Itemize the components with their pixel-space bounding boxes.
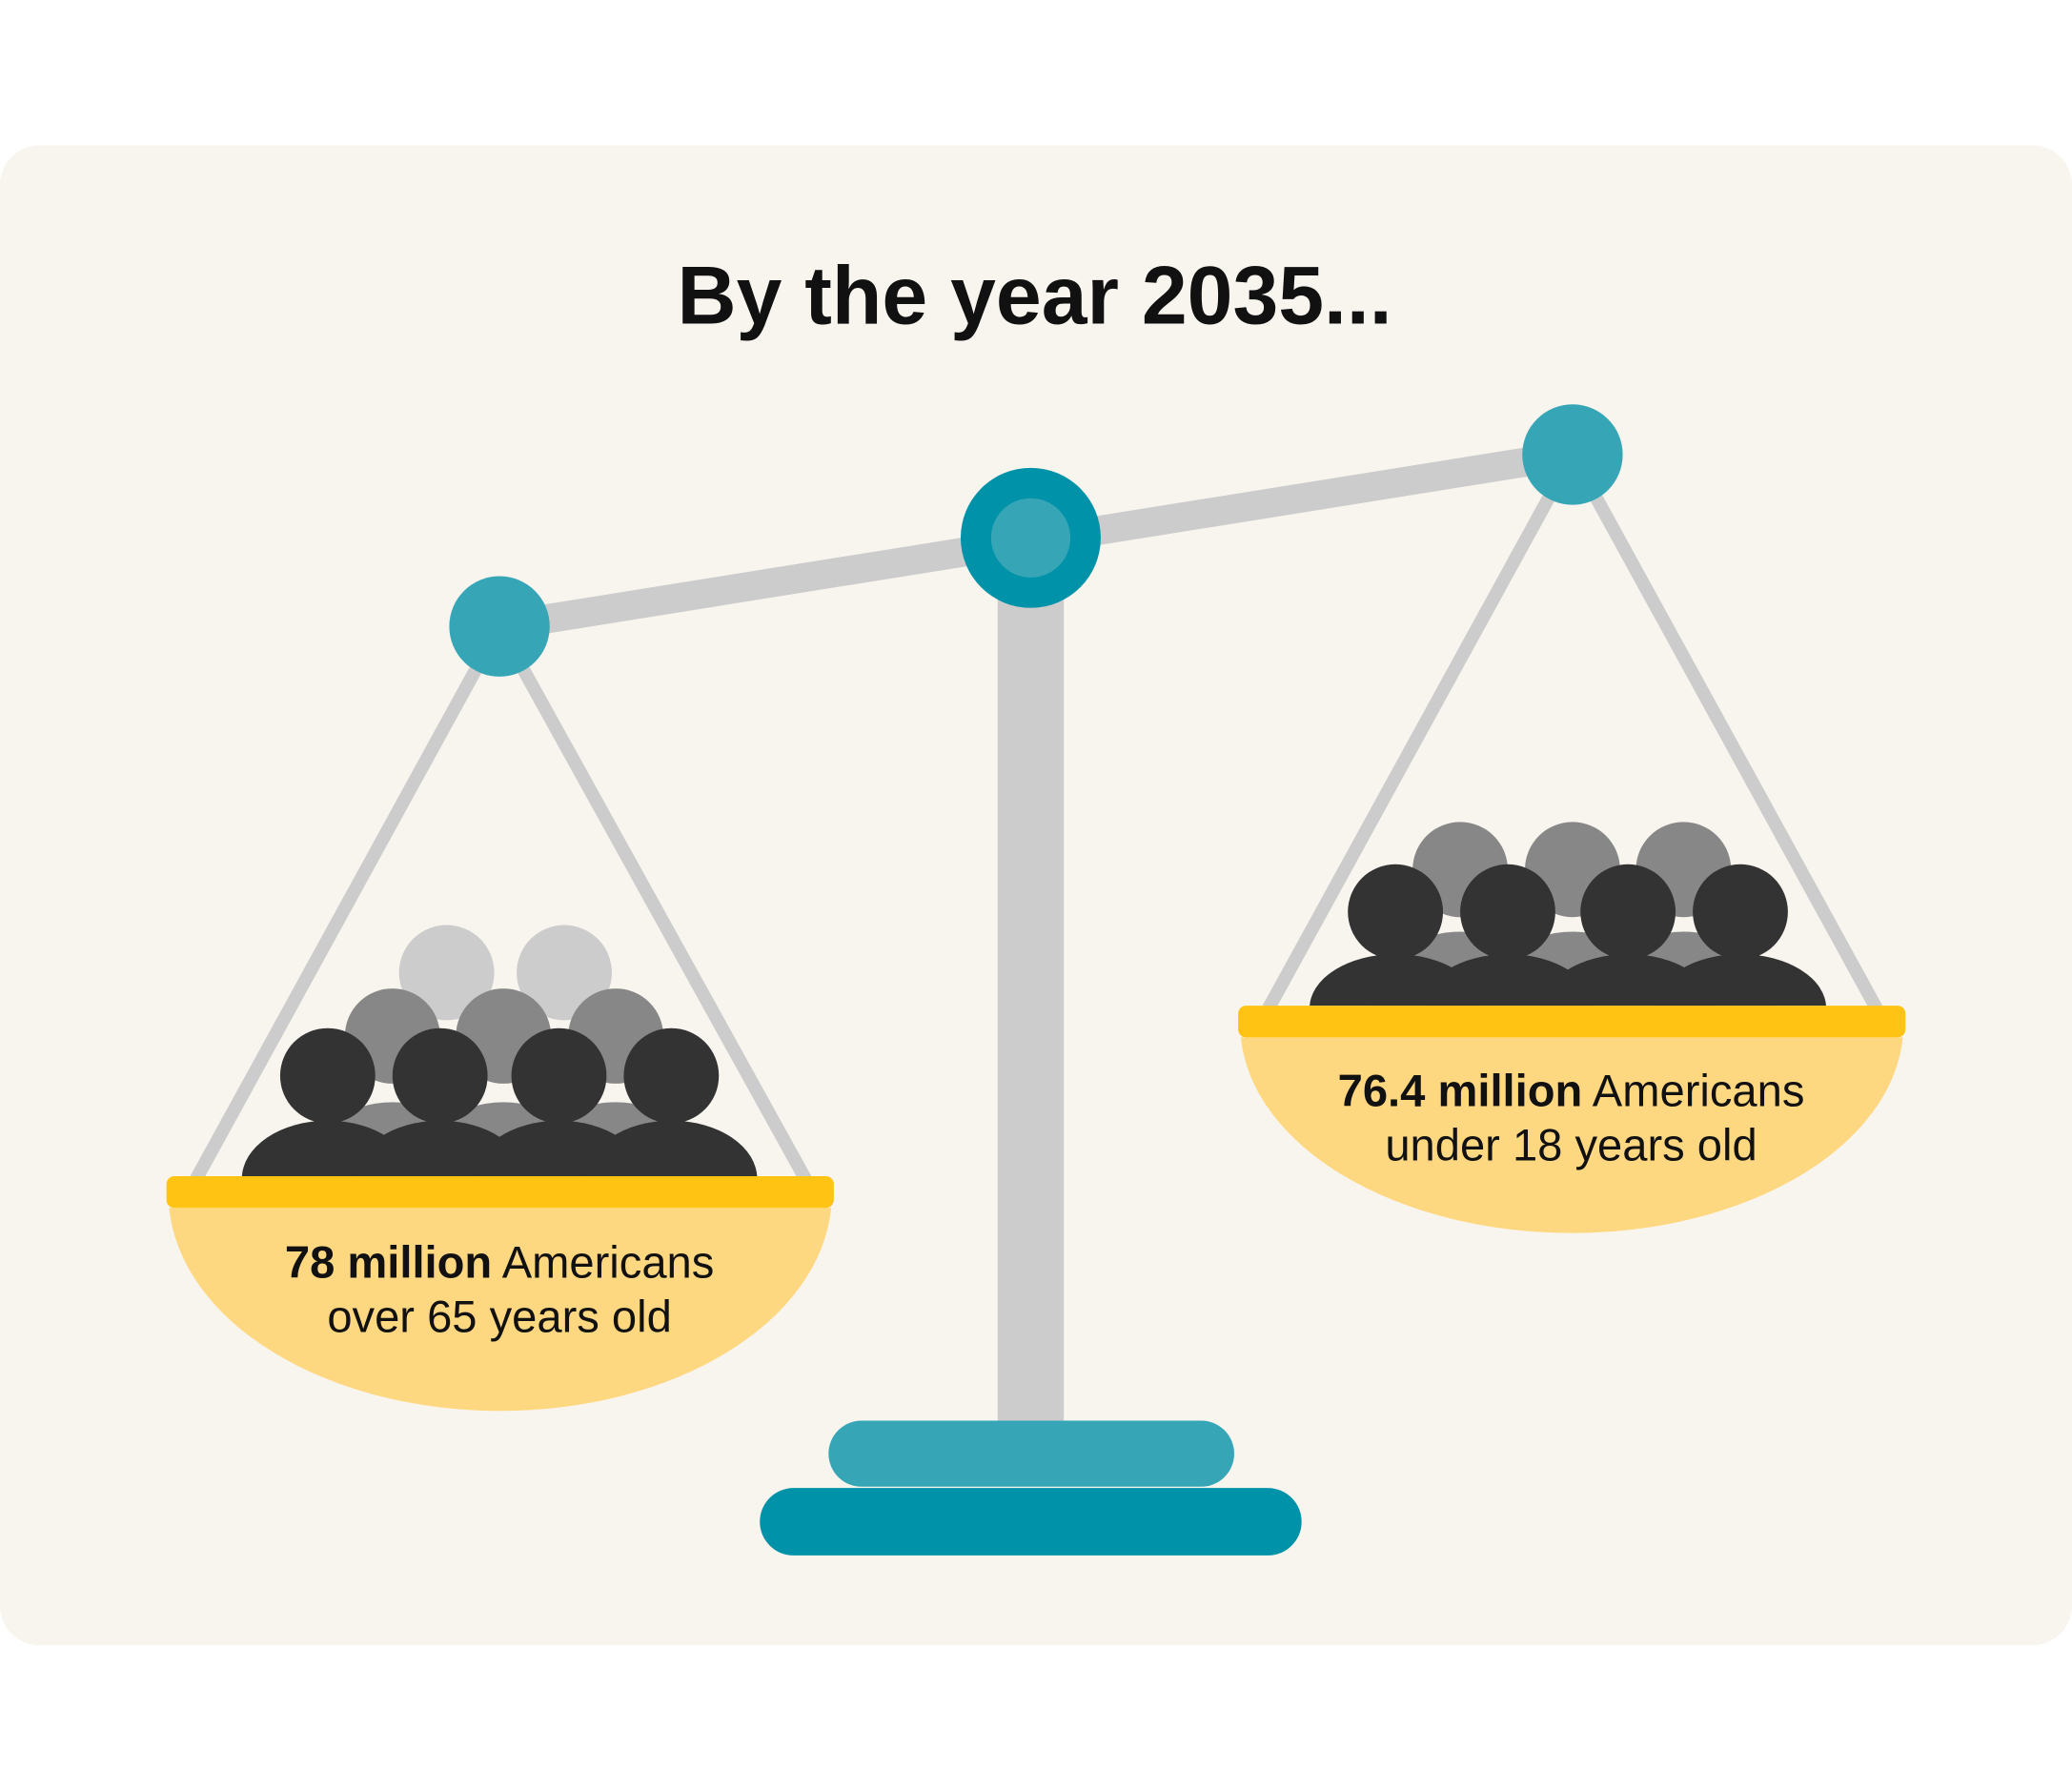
scale beam (499, 455, 1573, 626)
scale pillar (998, 555, 1064, 1434)
left pan: over 65 years old (327, 1292, 672, 1342)
title: By the year 2035... (678, 251, 1392, 342)
right pan: 76.4 million Americans (1338, 1065, 1804, 1115)
left pan (167, 1176, 834, 1411)
center pivot (961, 468, 1101, 608)
left pan: 78 million Americans (285, 1237, 714, 1288)
right pan (1238, 1006, 1905, 1233)
left strings (195, 626, 806, 1180)
base (760, 1420, 1302, 1556)
left people group (242, 925, 757, 1176)
right knob (1522, 404, 1623, 505)
right pan: under 18 years old (1385, 1119, 1757, 1170)
left knob (449, 577, 550, 677)
right people group (1310, 822, 1826, 1007)
right strings (1269, 455, 1877, 1008)
